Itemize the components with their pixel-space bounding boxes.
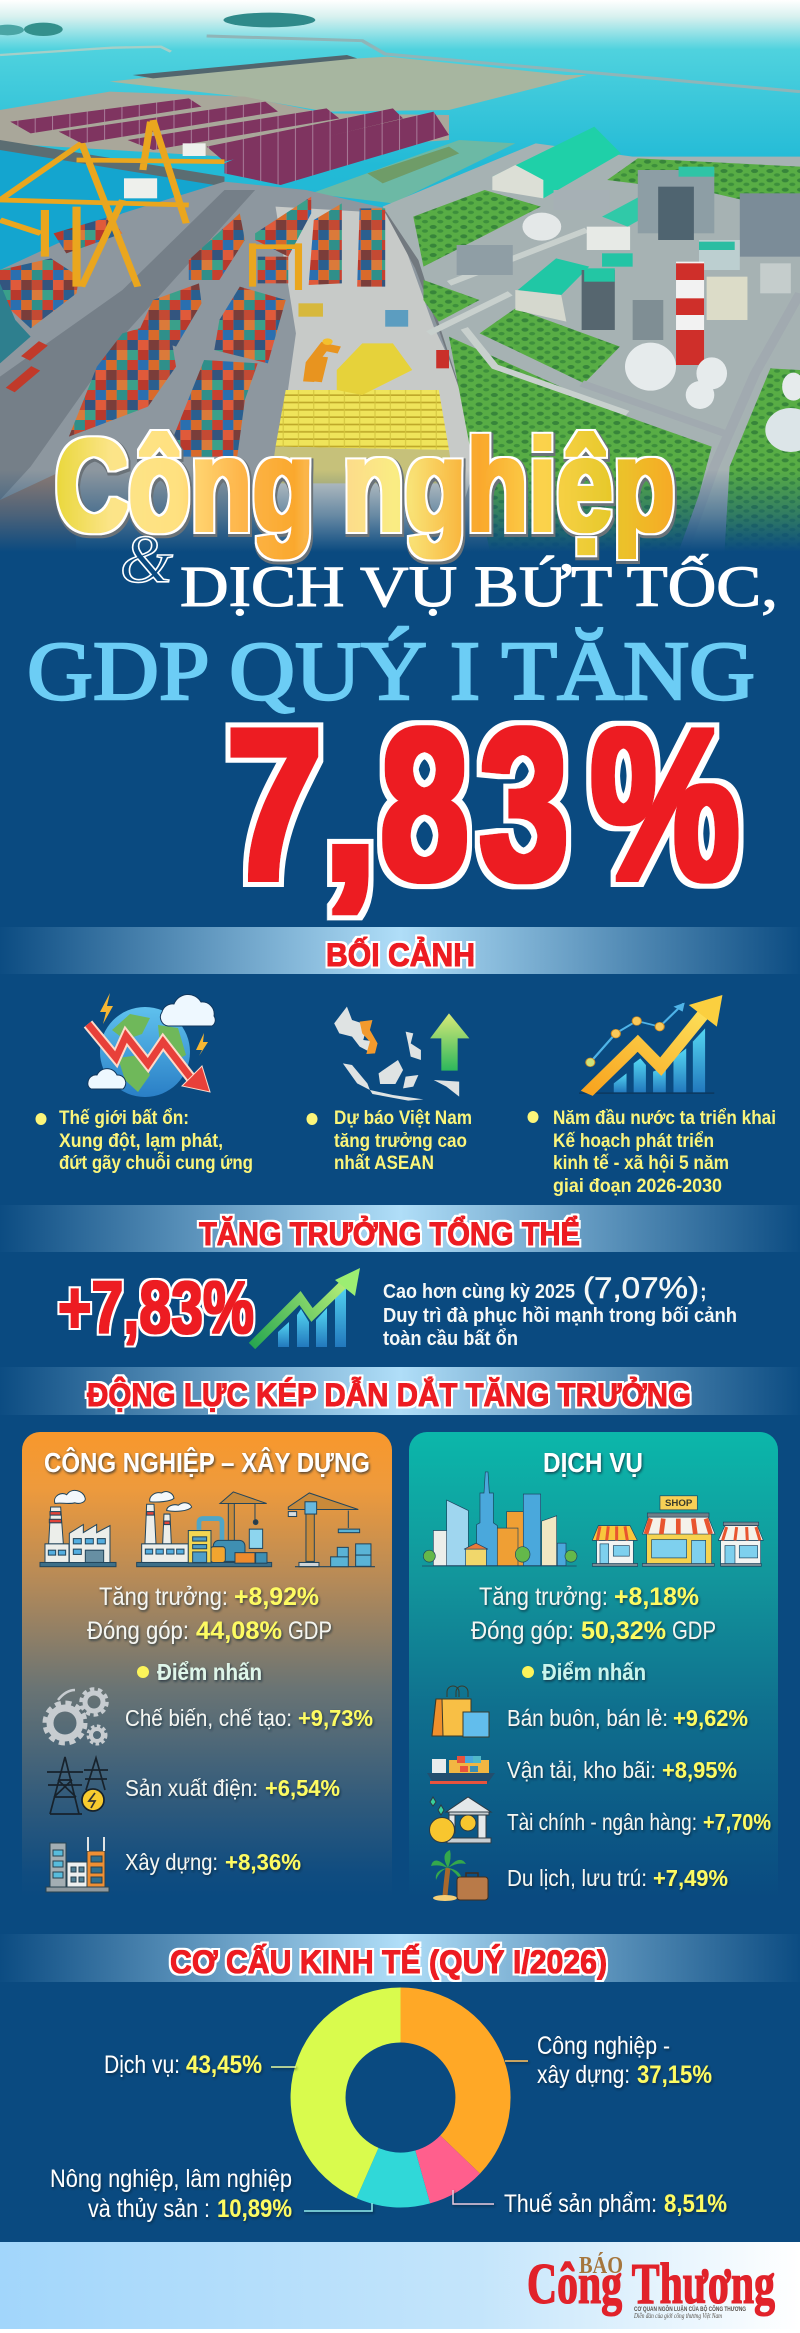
bullet text: five year plan: Năm đầu nước ta triển khai: [553, 1108, 776, 1129]
stats: growth and contribution: 44,08%: [196, 1617, 282, 1645]
logo: Báo Công Thương: BÁO: [579, 2253, 623, 2279]
highlights: sector growth: +6,54%: [265, 1775, 340, 1801]
icon: buildings: [46, 1837, 109, 1892]
highlights: sector growth: +7,70%: [703, 1809, 771, 1835]
section band: BỐI CẢNH: [0, 927, 800, 974]
bullet text: forecast: [306, 1108, 472, 1174]
panel: industry and construction: [22, 1432, 392, 1898]
highlight label: Điểm nhấn: Điểm nhấn: [542, 1659, 646, 1685]
bullet text: five year plan: kinh tế - xã hội 5 năm: [553, 1153, 729, 1174]
label: Nông nghiệp, lâm nghiệp và thủy sản: và thủy sản :: [88, 2195, 210, 2223]
title: 7,83%: [226, 683, 740, 925]
stats: growth and contribution: Đóng góp:: [87, 1617, 189, 1645]
label: Nông nghiệp, lâm nghiệp và thủy sản: Nông nghiệp, lâm nghiệp: [50, 2165, 292, 2193]
icon: palm and suitcase: [431, 1850, 488, 1901]
donut chart: economic structure: [291, 1988, 511, 2207]
stats: growth and contribution: GDP: [672, 1617, 716, 1645]
icon: shopping bags: [432, 1686, 489, 1737]
icons: city skyline and shops: [422, 1472, 763, 1566]
label: Công nghiệp - xây dựng: xây dựng:: [537, 2061, 630, 2089]
section band: TĂNG TRƯỞNG TỔNG THỂ: TĂNG TRƯỞNG TỔNG THỂ: [199, 1216, 580, 1252]
stats: growth and contribution: [87, 1583, 332, 1645]
text: comparison with 2025: ;: [700, 1281, 707, 1303]
title: 7,83%: 8: [380, 683, 469, 925]
highlights: sector growth: +7,49%: [653, 1865, 728, 1891]
highlights: sector growth: +9,62%: [673, 1705, 748, 1731]
title: GDP QUÝ I TĂNG: GDP QUÝ I TĂNG: [27, 625, 755, 718]
logo: Báo Công Thương: Diễn đàn của giới công thương Việt Nam: [633, 2312, 722, 2320]
label: Dịch vụ: [104, 2051, 296, 2079]
bullet text: forecast: tăng trưởng cao: [334, 1131, 467, 1152]
logo: Báo Công Thương: CƠ QUAN NGÔN LUẬN CỦA BỘ CÔNG THƯƠNG: [634, 2304, 746, 2313]
highlights: sector growth: Bán buôn, bán lẻ:: [507, 1705, 668, 1731]
stats: growth and contribution: Tăng trưởng:: [479, 1583, 608, 1611]
stats: growth and contribution: +8,18%: [614, 1583, 699, 1611]
icon: ASEAN map with up arrow: [334, 1007, 469, 1101]
icon: globe with falling arrow: [88, 993, 215, 1097]
label: Công nghiệp - xây dựng: Công nghiệp -: [537, 2032, 670, 2060]
icons: factories and crane: [40, 1490, 375, 1567]
footer band: [0, 2242, 800, 2329]
label: Dịch vụ: Dịch vụ:: [104, 2051, 180, 2079]
label: Công nghiệp - xây dựng: 37,15%: [637, 2061, 712, 2089]
highlights: sector growth: [125, 1705, 373, 1875]
highlights: sector growth: [507, 1705, 771, 1891]
icons: city skyline and shops: SHOP: [665, 1498, 692, 1508]
panel heading: DỊCH VỤ: DỊCH VỤ: [543, 1447, 643, 1478]
panel: services: [409, 1432, 778, 1901]
section band: TĂNG TRƯỞNG TỔNG THỂ: [0, 1205, 800, 1252]
stats: growth and contribution: +8,92%: [234, 1583, 319, 1611]
bullet text: five year plan: [528, 1108, 776, 1197]
label: Nông nghiệp, lâm nghiệp và thủy sản: [50, 2165, 372, 2223]
bullet text: world: [36, 1108, 253, 1174]
text: comparison with 2025: [383, 1272, 737, 1350]
label: Công nghiệp - xây dựng: [505, 2032, 712, 2089]
highlights: sector growth: +8,36%: [225, 1849, 301, 1875]
label: Thuế sản phẩm: [453, 2190, 727, 2218]
icon: gears: [45, 1689, 107, 1744]
text: comparison with 2025: Duy trì đà phục hồi mạnh trong bối cảnh: [383, 1305, 737, 1327]
title: DỊCH VỤ BỨT TỐC: DỊCH VỤ BỨT TỐC,: [180, 554, 778, 619]
stats: growth and contribution: 50,32%: [581, 1617, 666, 1645]
stats: growth and contribution: Tăng trưởng:: [99, 1583, 228, 1611]
label: Dịch vụ: 43,45%: [186, 2051, 262, 2079]
highlights: sector growth: Vận tải, kho bãi:: [507, 1757, 656, 1783]
title: 7,83%: 7: [226, 683, 323, 925]
section band: BỐI CẢNH: BỐI CẢNH: [326, 937, 475, 973]
highlights: sector growth: Tài chính - ngân hàng:: [507, 1809, 697, 1835]
bullet text: forecast: nhất ASEAN: [334, 1153, 434, 1174]
title: 7,83%: ,: [320, 683, 380, 925]
section band: CƠ CẤU KINH TẾ: [0, 1934, 800, 1982]
title: 7,83%: 3: [479, 683, 569, 925]
section band: ĐỘNG LỰC KÉP: [0, 1367, 800, 1415]
label: Nông nghiệp, lâm nghiệp và thủy sản: 10,89%: [217, 2195, 292, 2223]
highlights: sector growth: Chế biến, chế tạo:: [125, 1705, 292, 1731]
panel heading: CÔNG NGHIỆP – XÂY DỰNG: CÔNG NGHIỆP – XÂY DỰNG: [44, 1446, 370, 1478]
text: comparison with 2025: Cao hơn cùng kỳ 2025: [383, 1281, 575, 1303]
icon: power towers: [47, 1757, 108, 1814]
highlights: sector growth: +8,95%: [662, 1757, 737, 1783]
icon: bank and coins: [430, 1797, 491, 1843]
bullet text: world: đứt gãy chuỗi cung ứng: [59, 1152, 253, 1174]
icon: cargo ship: [427, 1756, 495, 1784]
hero photo: port and power plant: [0, 0, 800, 552]
highlights: sector growth: +9,73%: [298, 1705, 373, 1731]
stats: growth and contribution: [471, 1583, 716, 1645]
text: comparison with 2025: (7,07%): [583, 1272, 699, 1305]
stats: growth and contribution: Đóng góp:: [471, 1617, 574, 1645]
icon: growth chart with arrow: [579, 995, 722, 1094]
bullet text: world: Xung đột, lạm phát,: [59, 1131, 223, 1152]
section band: CƠ CẤU KINH TẾ: CƠ CẤU KINH TẾ (QUÝ I/2026): [170, 1944, 607, 1980]
label: Thuế sản phẩm: Thuế sản phẩm:: [504, 2190, 657, 2218]
bullet text: five year plan: giai đoạn 2026-2030: [553, 1176, 722, 1197]
section band: ĐỘNG LỰC KÉP: ĐỘNG LỰC KÉP DẪN DẮT TĂNG TRƯỞNG: [87, 1377, 691, 1413]
highlights: sector growth: Du lịch, lưu trú:: [507, 1865, 647, 1891]
stats: growth and contribution: GDP: [288, 1617, 332, 1645]
title: 7,83%: %: [590, 683, 740, 925]
label: Thuế sản phẩm: 8,51%: [664, 2190, 727, 2218]
bullet text: world: Thế giới bất ổn:: [59, 1108, 189, 1129]
icon: green rising arrow with bars: [252, 1268, 360, 1347]
highlights: sector growth: Sản xuất điện:: [125, 1775, 258, 1801]
bullet text: forecast: Dự báo Việt Nam: [334, 1108, 472, 1129]
big number: +7,83%: +7,83%: [58, 1266, 254, 1349]
highlight label: Điểm nhấn: Điểm nhấn: [157, 1659, 262, 1685]
highlights: sector growth: Xây dựng:: [125, 1849, 218, 1875]
text: comparison with 2025: toàn cầu bất ổn: [383, 1328, 518, 1350]
bullet text: five year plan: Kế hoạch phát triển: [553, 1131, 714, 1152]
title: ampersand: &: [120, 521, 173, 597]
